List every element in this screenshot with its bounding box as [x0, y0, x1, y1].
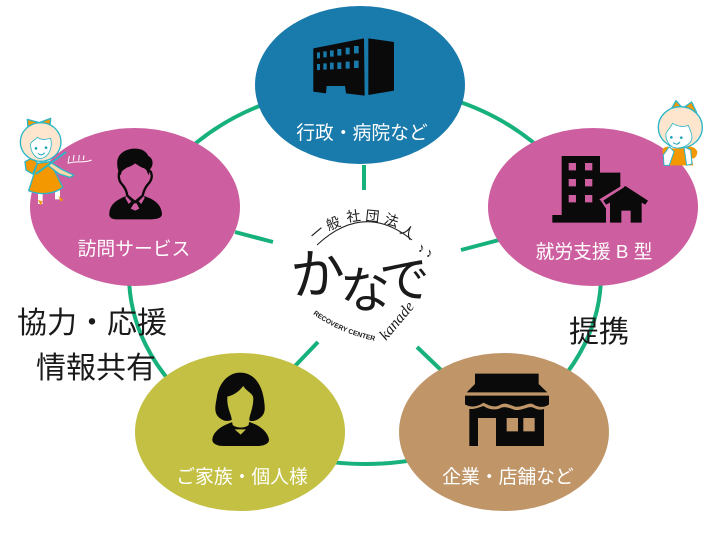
label: ご家族・個人様: [176, 466, 308, 487]
icon: man in suit: [109, 149, 162, 219]
logo arc: [317, 222, 412, 245]
logo heading arc text: 人: [397, 221, 418, 242]
label: 行政・病院など: [296, 122, 428, 143]
logo heading arc text: 般: [324, 213, 343, 233]
illustration: girl with violin: [20, 118, 92, 205]
logo main text: [289, 243, 433, 319]
logo heading arc text: 団: [365, 207, 380, 225]
logo music notes: [418, 240, 432, 260]
side text: 提携: 提携: [569, 316, 629, 349]
logo music notes: ♪: [426, 245, 432, 260]
logo heading arc text: 社: [345, 207, 361, 225]
logo main text: な: [340, 263, 390, 319]
icon: building with house: [552, 156, 648, 223]
center logo: かなで: [289, 207, 433, 344]
side text: 協力・応援 情報共有: 協力・応援: [17, 307, 167, 340]
icon: shop: [465, 374, 549, 446]
icon: office building: [313, 38, 394, 96]
node: 企業・店舗など: [399, 353, 609, 511]
side text: 協力・応援 情報共有: 情報共有: [36, 352, 156, 385]
node: ご家族・個人様: [135, 353, 345, 511]
logo heading arc text: 一: [306, 222, 327, 243]
logo main text: か: [289, 243, 347, 307]
illustration: girl resting chin: [658, 101, 702, 165]
logo subtitle: [313, 298, 418, 344]
label: 訪問サービス: [78, 238, 190, 259]
icon: woman: [212, 373, 269, 446]
side text: 協力・応援 情報共有: [17, 307, 167, 385]
node: 訪問サービス: [30, 128, 240, 286]
logo heading arc text: 法: [382, 210, 401, 230]
logo music notes: ♪: [418, 240, 424, 255]
label: 企業・店舗など: [442, 466, 574, 487]
label: 就労支援 B 型: [536, 241, 652, 262]
node: 就労支援B型: [488, 128, 698, 286]
green connection ring: [129, 86, 601, 464]
logo heading arc text: [306, 207, 418, 243]
node: 行政・病院など: [255, 6, 465, 164]
logo subtitle: kanade: [376, 298, 418, 344]
logo subtitle: RECOVERY CENTER: [313, 310, 375, 341]
logo main text: で: [377, 251, 433, 312]
